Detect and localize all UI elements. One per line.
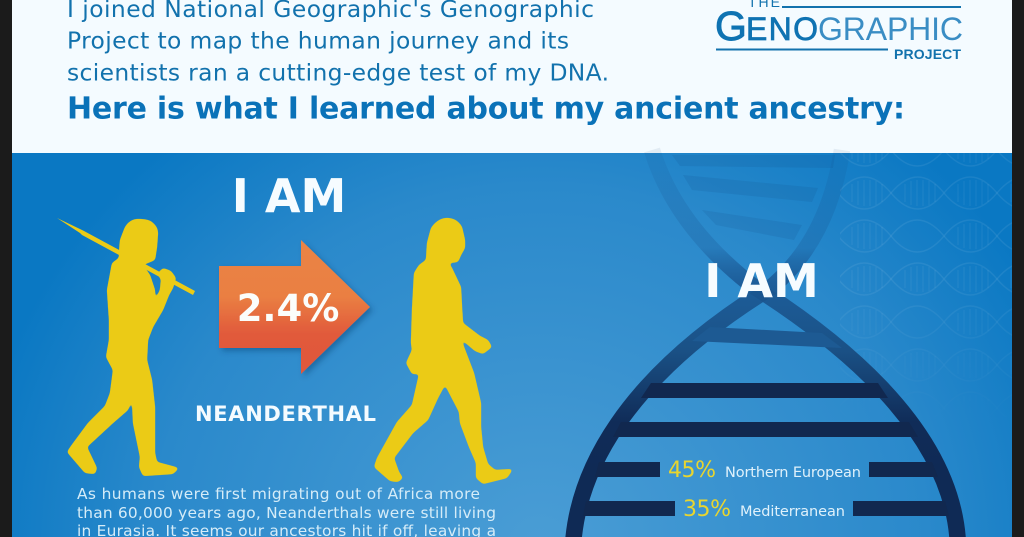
intro text: Project to map the human journey and its — [67, 26, 569, 54]
body text: than 60,000 years ago, Neanderthals were still living — [77, 504, 496, 522]
headline: Here is what I learned about my ancient ancestry: — [67, 92, 905, 126]
ancestry stat: Northern European — [668, 458, 861, 483]
ancestry stat: Mediterranean: 35% — [683, 497, 731, 522]
rung 2 — [613, 422, 918, 437]
top rung — [692, 327, 842, 348]
ancestry stat: Mediterranean — [683, 497, 845, 522]
rung 3 left — [595, 462, 660, 477]
body text — [77, 485, 496, 537]
faded upper rungs — [672, 155, 835, 240]
arrow — [219, 240, 370, 374]
large DNA helix — [573, 150, 958, 537]
body text: As humans were first migrating out of Africa more — [77, 485, 480, 503]
logo: The Genographic Project: GRAPHIC — [818, 11, 963, 47]
ancestry stat: Northern European: 45% — [668, 458, 716, 483]
value: 2.4%: 2.4% — [237, 287, 339, 330]
logo: The Genographic Project: PROJECT — [894, 46, 961, 62]
icon: Neanderthal silhouette with spear — [57, 218, 195, 476]
heading: I AM (Neanderthal): I AM — [232, 169, 346, 223]
ancestry stat: Mediterranean: Mediterranean — [740, 504, 845, 520]
background DNA pattern — [840, 153, 1012, 374]
rung 1 — [641, 383, 888, 398]
header panel — [12, 0, 1012, 153]
intro text: scientists ran a cutting-edge test of my DNA. — [67, 58, 609, 86]
arrow with percentage — [219, 240, 370, 374]
main blue panel — [12, 150, 1012, 537]
icon: modern human silhouette — [374, 218, 513, 484]
logo: The Genographic Project — [715, 0, 963, 62]
heading: I AM (regional ancestry): I AM — [704, 254, 819, 308]
label: Neanderthal: NEANDERTHAL — [195, 402, 376, 426]
helix strands — [573, 150, 958, 537]
intro text — [67, 0, 609, 86]
rung 3 right — [869, 462, 938, 477]
ancestry stat: Northern European: Northern European — [725, 465, 861, 481]
rung 4 left — [583, 501, 675, 516]
logo: The Genographic Project: G — [715, 3, 747, 49]
logo: The Genographic Project: ENO — [746, 11, 818, 47]
rung 4 right — [853, 501, 949, 516]
